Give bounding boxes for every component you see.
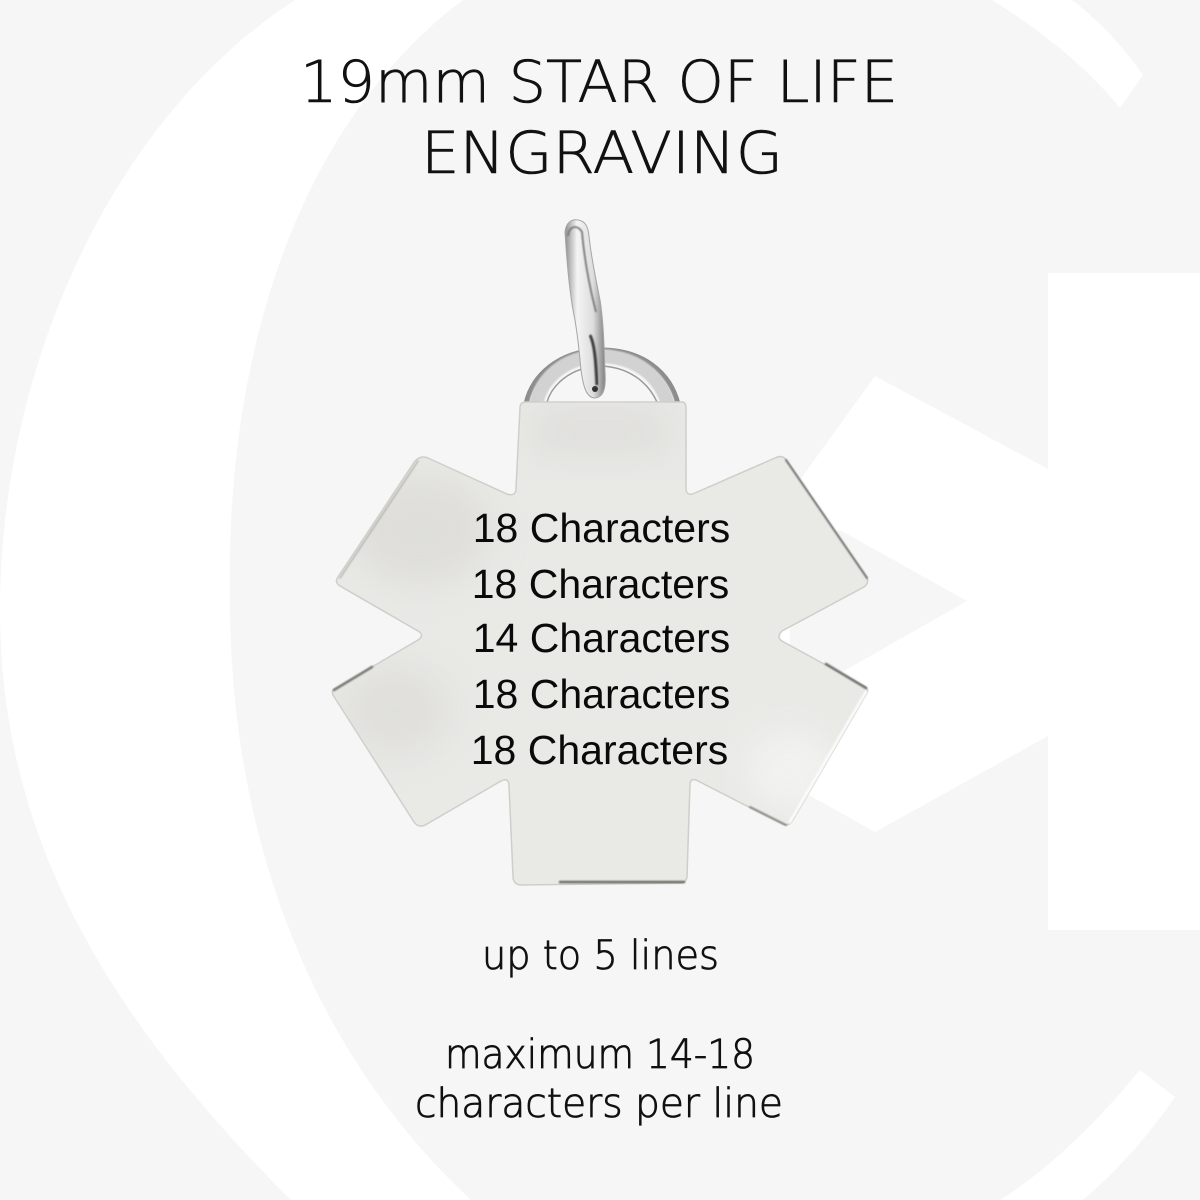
engraving sample text: 18 Characters: [473, 505, 730, 551]
title: 19mm STAR OF LIFE: [300, 48, 898, 116]
split ring loop: [565, 220, 605, 398]
character limit note: [415, 1032, 783, 1127]
star of life plate: [332, 402, 868, 885]
engraving sample text: 14 Characters: [473, 615, 730, 661]
engraving sample text: 18 Characters: [473, 671, 730, 717]
plate edge highlights: [334, 460, 867, 882]
engraving sample text: 18 Characters: [471, 727, 728, 773]
title: [300, 48, 898, 187]
watermark: C left stroke: [0, 0, 471, 1200]
jump ring arch: [526, 350, 678, 404]
watermark: C lower terminal: [1000, 1070, 1175, 1200]
character limit note: maximum 14-18: [445, 1032, 755, 1078]
engraving sample text: 18 Characters: [472, 561, 729, 607]
engraving sample text: [471, 505, 730, 773]
title: ENGRAVING: [421, 119, 783, 187]
line limit note: up to 5 lines: [482, 933, 719, 979]
pendant illustration: [332, 220, 868, 885]
watermark: right bar: [1048, 273, 1200, 930]
character limit note: characters per line: [415, 1081, 783, 1127]
watermark: arrow chevron: [780, 376, 1048, 832]
watermark: C upper terminal: [992, 0, 1143, 108]
